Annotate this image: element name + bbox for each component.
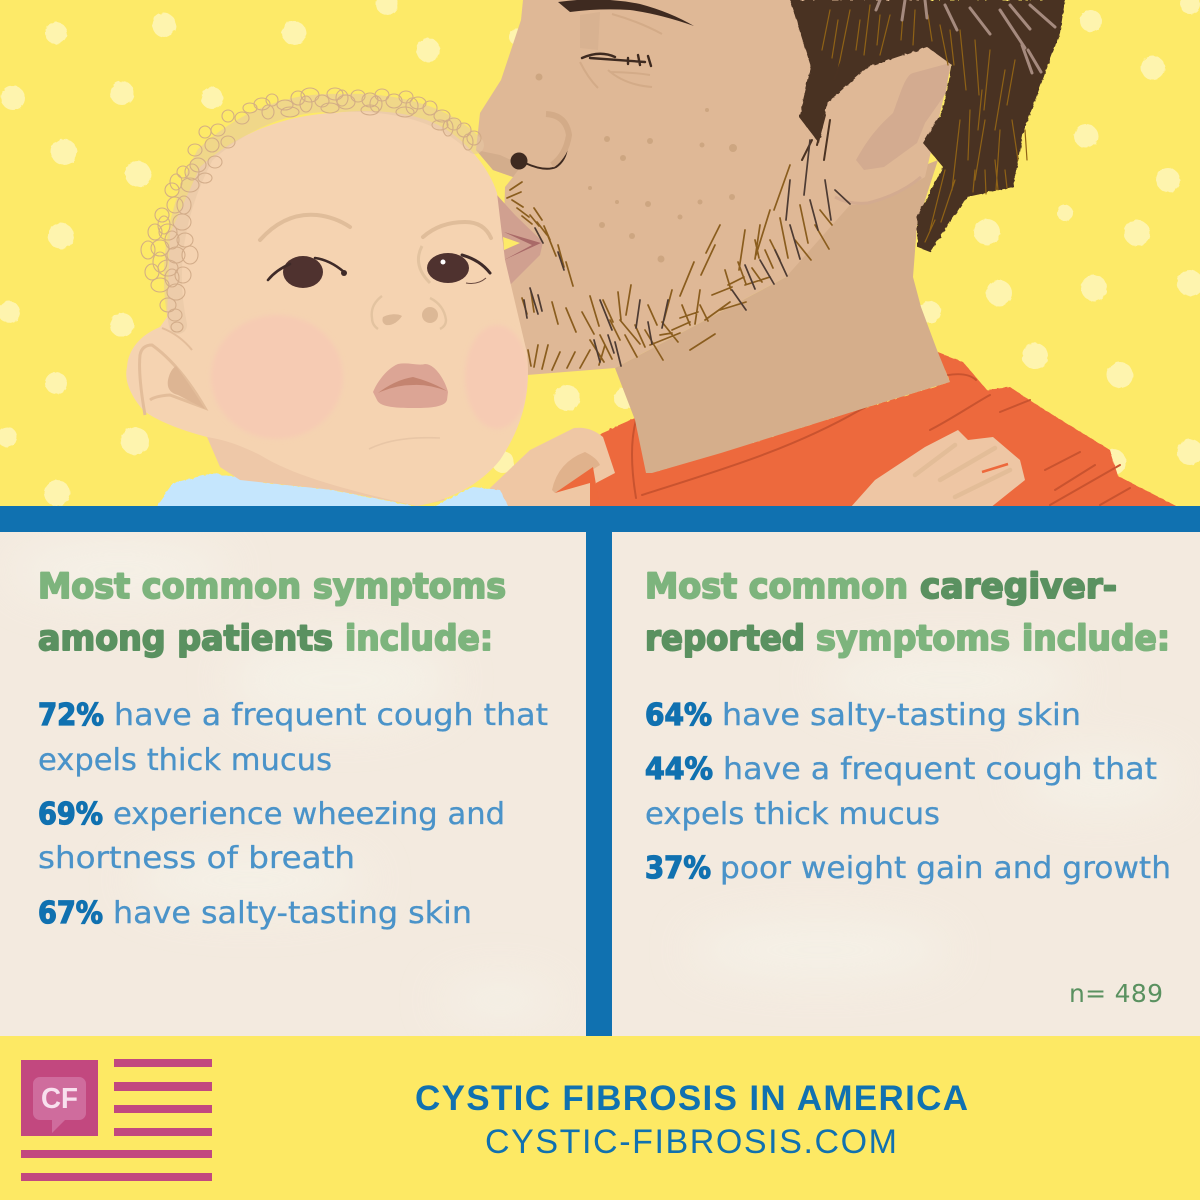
stat: 69% wheezing: experience wheezing and <box>113 797 505 832</box>
stat: 72% cough: 72% <box>38 698 104 733</box>
father shirt <box>552 352 1180 508</box>
father lips <box>497 195 543 285</box>
footer band <box>0 1036 1200 1200</box>
heading right <box>645 567 1170 659</box>
footer website: CYSTIC-FIBROSIS.COM <box>485 1123 897 1161</box>
illustration: baby <box>126 88 1025 508</box>
baby eye socket <box>418 246 430 283</box>
father ear lobe line <box>835 177 921 203</box>
baby neck shadow <box>207 430 445 506</box>
father beard <box>507 140 850 370</box>
baby head <box>126 111 528 506</box>
stat: 67% salty skin: have salty-tasting skin <box>113 896 472 931</box>
footer title: CYSTIC FIBROSIS IN AMERICA <box>415 1079 968 1118</box>
stat: 67% salty skin: 67% <box>38 896 103 931</box>
baby left eye <box>268 256 347 288</box>
stat: 69% wheezing: 69% <box>38 797 103 832</box>
stat: 72% cough: have a frequent cough that <box>114 698 548 733</box>
top blue rule <box>0 506 1200 532</box>
shirt folds <box>632 374 1130 505</box>
baby hair tint <box>173 103 475 325</box>
father face <box>476 0 952 375</box>
baby lips <box>373 363 448 408</box>
panel background right <box>612 532 1200 1036</box>
stat: 44% cough: have a frequent cough that <box>723 752 1157 787</box>
stat: 64% salty skin: have salty-tasting skin <box>722 698 1081 733</box>
heading right: include: <box>1022 619 1170 659</box>
heading left: symptoms <box>313 567 506 607</box>
stat: 37% weight: 37% <box>645 851 711 886</box>
baby curly hair <box>141 88 481 332</box>
centre blue divider <box>586 532 612 1036</box>
illustration background: yellow with polka dots <box>0 0 1200 506</box>
speech bubble <box>33 1077 86 1133</box>
heading right: caregiver- <box>920 567 1117 607</box>
flag canton <box>21 1060 98 1136</box>
baby right eye <box>427 253 490 283</box>
heading left <box>38 567 506 659</box>
stat: 44% cough <box>645 752 1157 832</box>
baby ear <box>140 328 205 415</box>
panel texture left <box>10 540 560 1020</box>
father hair <box>790 0 1065 252</box>
father nose and nostril <box>510 114 569 170</box>
father nose shadow <box>476 150 522 177</box>
heading left: among patients <box>38 619 333 659</box>
baby chin line <box>369 438 440 449</box>
stat: 64% salty skin: 64% <box>645 698 712 733</box>
stat: 44% cough: 44% <box>645 752 713 787</box>
father ear shade <box>856 63 950 170</box>
flag stripes <box>21 1059 212 1181</box>
sample size note: n= 489 <box>1069 979 1163 1008</box>
illustration: father <box>476 0 1180 508</box>
father freckles <box>536 74 737 262</box>
stat: 69% wheezing <box>38 797 505 876</box>
stat: 72% cough: expels thick mucus <box>38 743 332 778</box>
heading right: Most common <box>645 567 908 607</box>
logo: CF flag <box>21 1059 212 1181</box>
stat: 44% cough: expels thick mucus <box>645 797 940 832</box>
baby hand on chest <box>850 430 1025 508</box>
stat: 72% cough <box>38 698 548 778</box>
heading right: symptoms <box>816 619 1010 659</box>
baby cheeks <box>229 334 528 424</box>
baby nose <box>372 296 446 329</box>
heading left: include: <box>345 619 493 659</box>
baby eyebrows <box>260 215 491 240</box>
heading right: reported <box>645 619 805 659</box>
panel: caregiver-reported symptoms <box>612 532 1200 1036</box>
hair highlights <box>802 0 1055 242</box>
father neck <box>615 160 950 473</box>
logo text: CF <box>41 1083 78 1115</box>
panel texture right <box>690 650 1180 980</box>
baby blue bib <box>155 473 509 508</box>
heading left: Most common <box>38 567 301 607</box>
stat: 69% wheezing: shortness of breath <box>38 841 355 876</box>
father closed eye and brow <box>558 0 694 88</box>
panel background left <box>0 532 586 1036</box>
panel: patient symptoms <box>0 532 586 1036</box>
polka dots <box>0 0 1200 506</box>
stat: 37% weight: poor weight gain and growth <box>720 851 1171 886</box>
baby hand on shoulder <box>490 428 615 508</box>
